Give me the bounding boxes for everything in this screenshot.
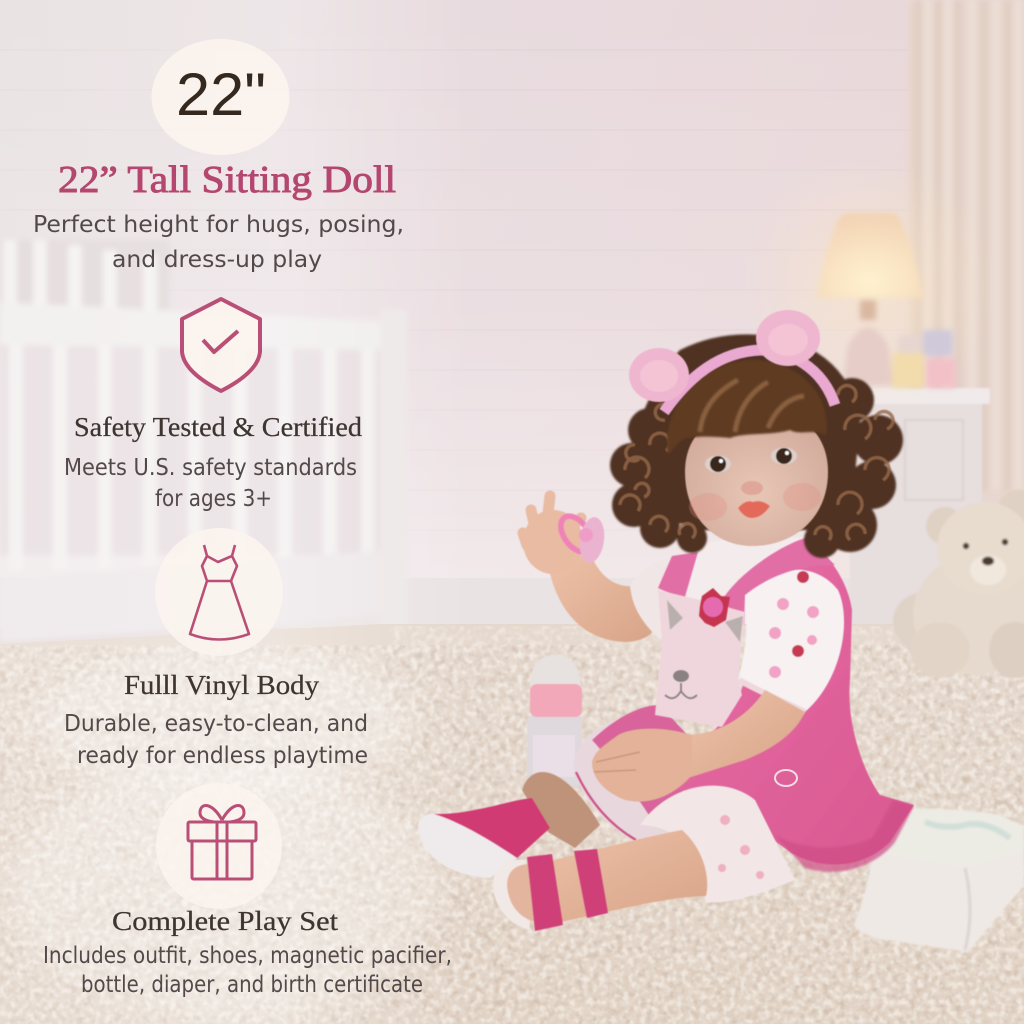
heading: play set: Complete Play Set: [112, 906, 339, 936]
doll bloomers: [640, 786, 795, 902]
feature: safety: [64, 299, 363, 512]
heading: height: 22” Tall Sitting Doll: [58, 159, 396, 201]
doll pacifier: [555, 511, 607, 564]
icon: gift box in circle: [156, 783, 282, 909]
doll raised arm: [548, 552, 655, 642]
icon: 22 inch badge: 22": [176, 61, 266, 128]
doll left sleeve and shirt: [630, 536, 808, 640]
doll dress ruffle hem: [775, 800, 914, 872]
background: nursery wall: [0, 0, 1024, 640]
text: safety description: Meets U.S. safety standards: [64, 455, 357, 481]
doll dress body: [670, 538, 914, 864]
doll sandal: [493, 849, 608, 931]
feature: play set: [43, 783, 452, 998]
text: safety description: for ages 3+: [155, 486, 272, 512]
doll headband with ears: [629, 310, 835, 412]
doll diaper: [854, 808, 1024, 952]
background: carpet: [0, 624, 1024, 1024]
icon: dress in circle: [155, 528, 283, 656]
feature: height: [33, 39, 404, 273]
icon: shield with check: [182, 299, 260, 391]
background: nightstand: [842, 388, 990, 640]
doll lap arm and hand: [592, 690, 805, 802]
heading: vinyl body: Fulll Vinyl Body: [124, 670, 320, 700]
doll front leg: [515, 830, 707, 926]
background: curtains: [908, 0, 1024, 495]
doll dress loop: [775, 770, 797, 786]
doll raised hand: [523, 496, 583, 574]
doll hair: [610, 334, 903, 558]
feature: vinyl body: [64, 528, 368, 769]
doll face: [685, 410, 828, 546]
baby bottle: [527, 655, 582, 787]
doll dress straps: [658, 538, 835, 625]
doll back leg and shoe: [418, 772, 600, 878]
text: height description: and dress-up play: [112, 247, 322, 273]
text: vinyl description: ready for endless playtime: [77, 743, 368, 769]
heading: safety: Safety Tested & Certified: [74, 412, 363, 442]
text: vinyl description: Durable, easy-to-clean, and: [64, 711, 368, 737]
doll bloomer flowers: [718, 815, 764, 879]
text: play set description: bottle, diaper, and birth certificate: [81, 972, 423, 998]
icon: 22 inch badge: [152, 39, 290, 155]
background: teddy bear: [893, 490, 1024, 678]
text: play set description: Includes outfit, shoes, magnetic pacifier,: [43, 943, 452, 969]
background: glowing lamp and candles: [738, 155, 998, 415]
doll cat bib: [655, 590, 745, 727]
doll right sleeve with flowers: [738, 569, 844, 712]
doll bangs: [667, 360, 827, 455]
doll figure: [418, 310, 914, 931]
background: left white haze: [0, 0, 470, 1024]
doll flower patch: [699, 588, 730, 627]
text: height description: Perfect height for hugs, posing,: [33, 212, 404, 238]
background: white crib: [0, 240, 407, 642]
doll skirt ruffle: [573, 705, 720, 842]
doll bangs highlight: [700, 380, 804, 432]
